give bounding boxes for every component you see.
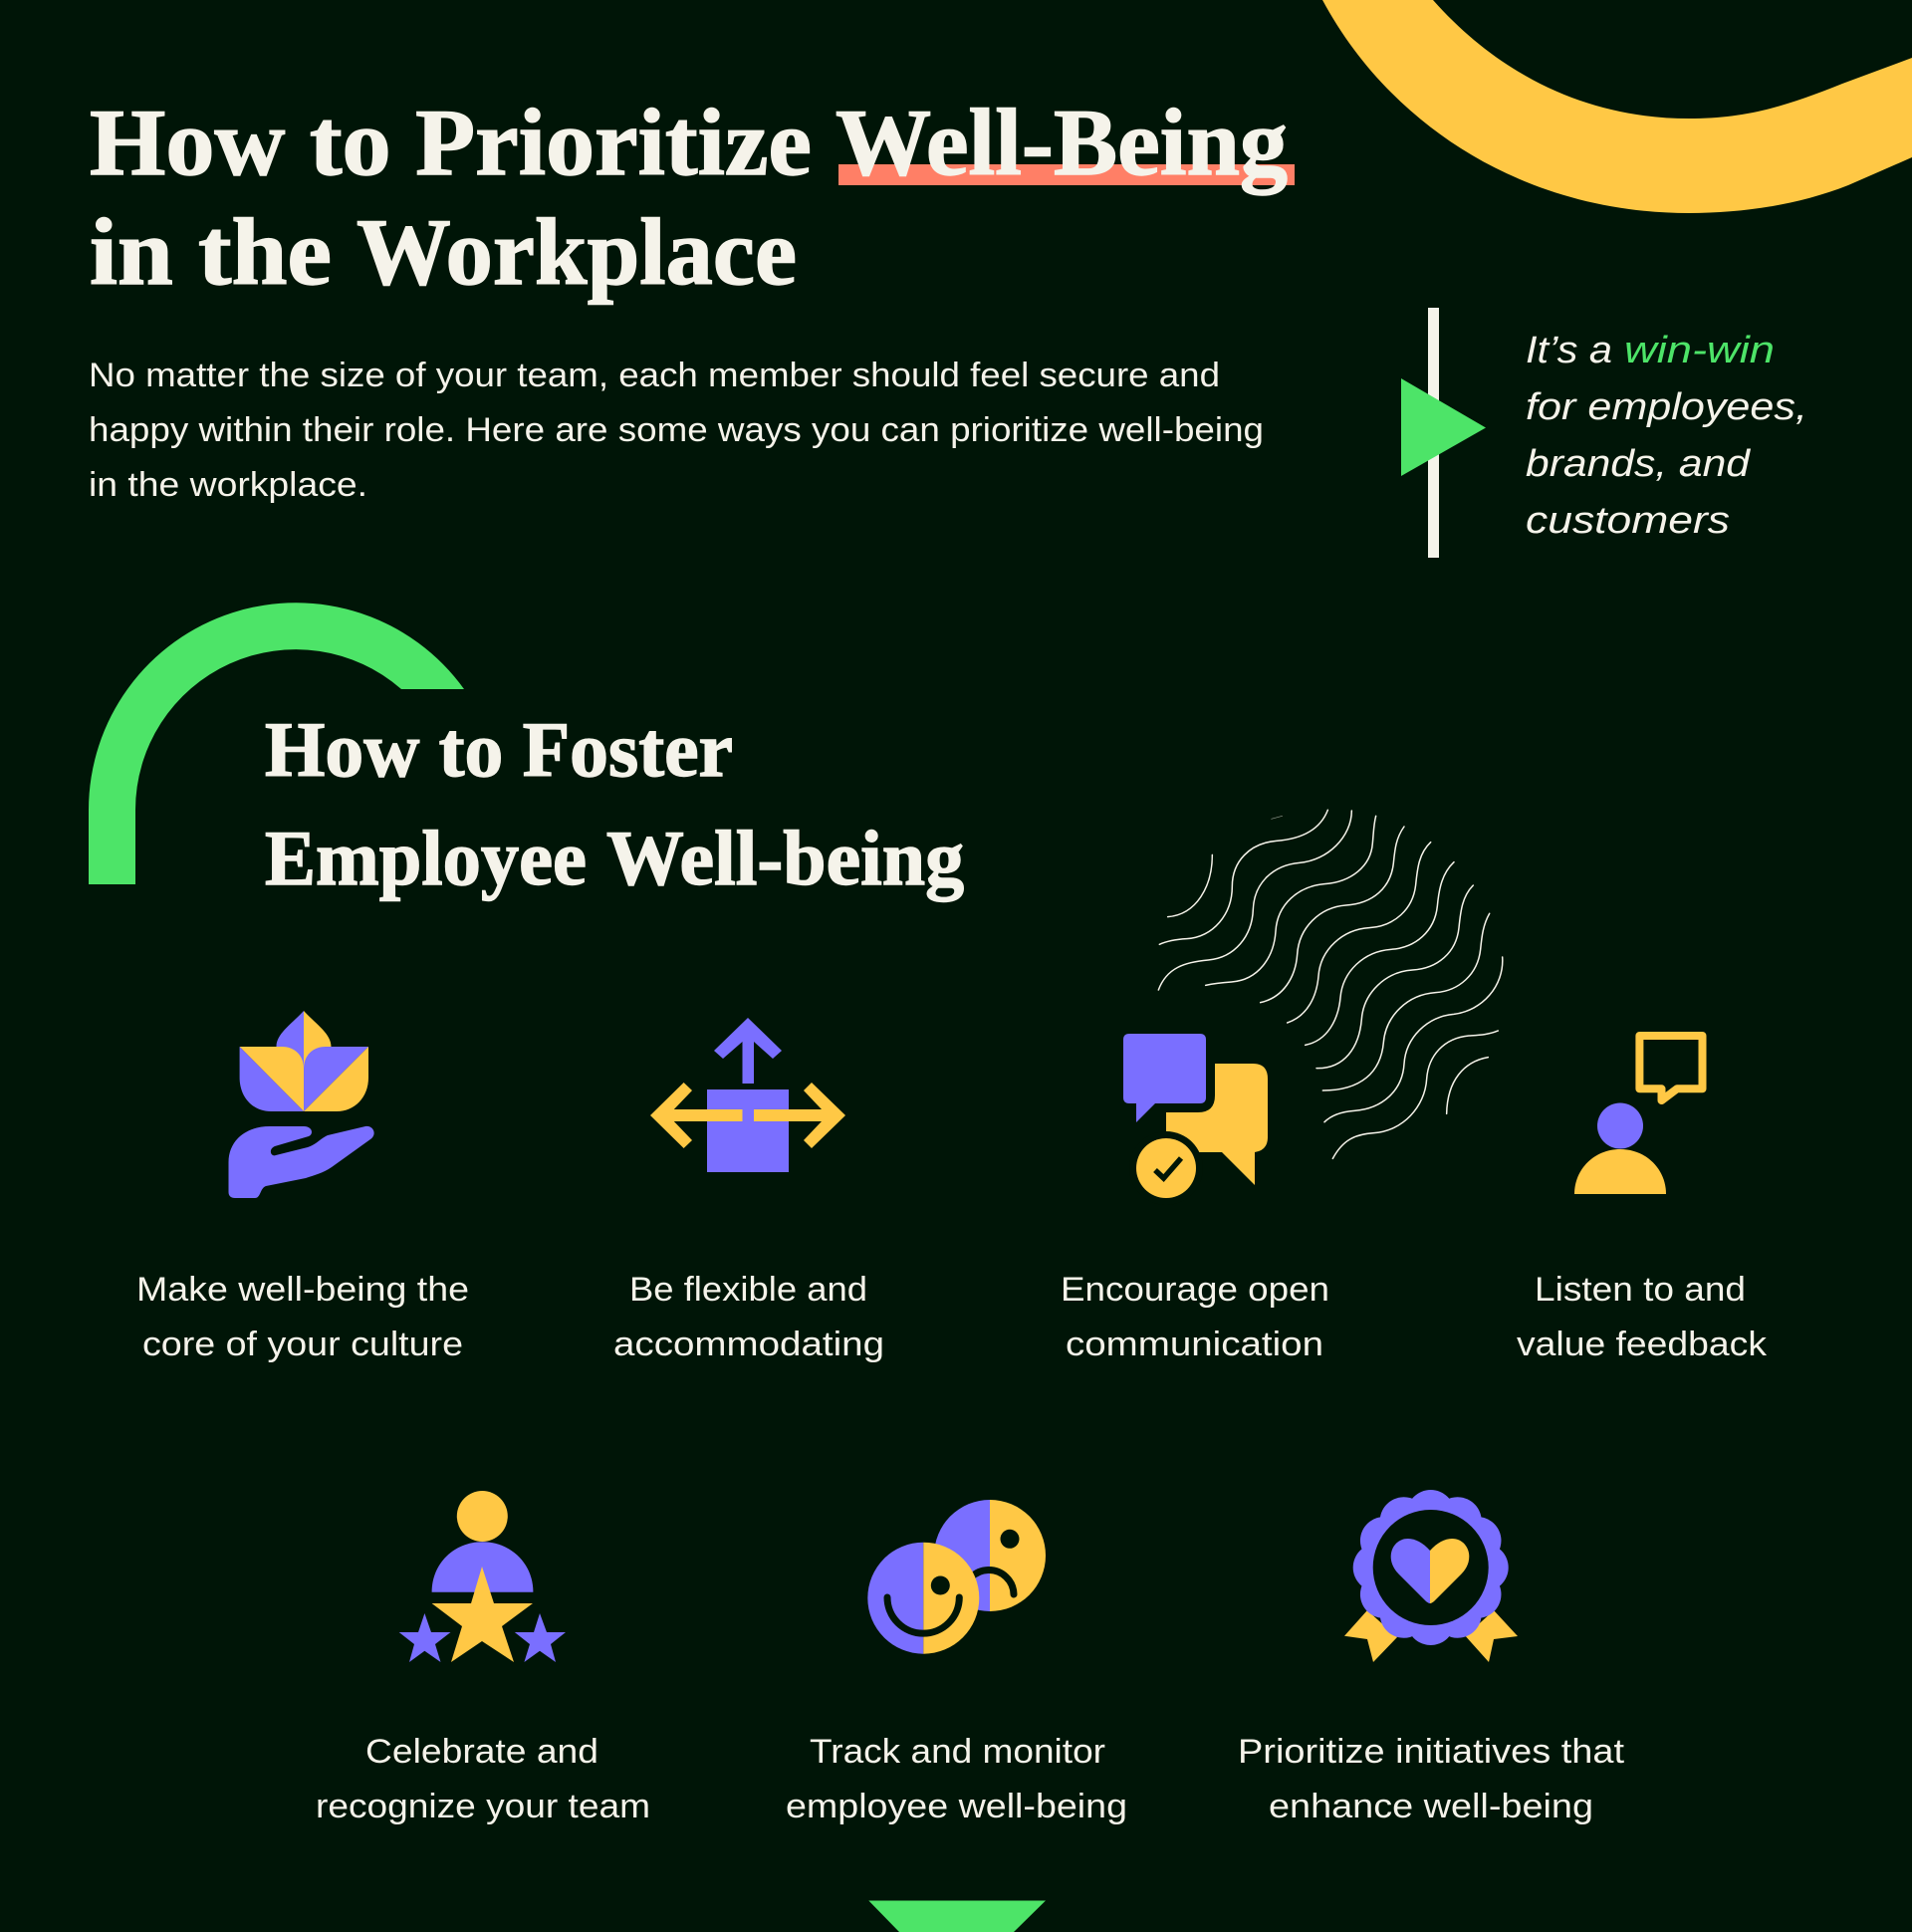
intro paragraph: [89, 357, 1264, 504]
title line 2: [90, 199, 797, 305]
title: [90, 90, 1295, 305]
title line 2: Workplace: [357, 199, 797, 305]
label: communication: Encourage open: [1061, 1271, 1329, 1309]
callout text: It’s a: [1526, 330, 1612, 371]
label: celebrate: Celebrate and: [365, 1733, 598, 1771]
label: initiatives: [1238, 1733, 1625, 1825]
callout text: [1526, 330, 1807, 542]
label: track: [786, 1733, 1127, 1825]
label: make well-being: core of your culture: [142, 1326, 463, 1363]
label: flexible: Be flexible and: [629, 1271, 867, 1309]
title line 1: [90, 90, 1288, 195]
label: communication: [1061, 1271, 1329, 1363]
icon: happy and sad faces: [867, 1500, 1046, 1654]
icon: speech bubbles with check: [1123, 1034, 1268, 1205]
intro paragraph: No matter the size of your team, each member should feel secure and: [89, 357, 1220, 394]
callout text: win-win: [1624, 330, 1775, 371]
callout green triangle: [1401, 378, 1486, 476]
label: feedback: Listen to and: [1535, 1271, 1746, 1309]
label: feedback: value feedback: [1517, 1326, 1768, 1363]
label: initiatives: enhance well-being: [1269, 1788, 1593, 1825]
section heading: How to Foster: [265, 706, 733, 793]
section heading: Well-being: [606, 815, 964, 901]
label: make well-being: [136, 1271, 469, 1363]
label: track: employee well-being: [786, 1788, 1127, 1825]
callout text: brands, and: [1526, 443, 1752, 485]
title line 1: Well-Being: [836, 90, 1288, 195]
decorative yellow swoosh: [1322, 0, 1912, 213]
label: communication: communication: [1066, 1326, 1323, 1363]
callout divider bar: [1428, 308, 1439, 558]
icon: box with arrows: [650, 1018, 845, 1172]
wavy line pattern: [1158, 810, 1503, 1158]
title highlight underline: [838, 164, 1295, 185]
label: initiatives: Prioritize initiatives that: [1238, 1733, 1625, 1771]
label: celebrate: [316, 1733, 650, 1825]
callout text: for employees,: [1526, 386, 1807, 428]
label: make well-being: Make well-being the: [136, 1271, 469, 1309]
green arc behind section heading: [89, 603, 464, 884]
label: track: Track and monitor: [810, 1733, 1105, 1771]
icon: award badge with heart: [1344, 1488, 1518, 1662]
icon: person with stars: [399, 1491, 566, 1662]
intro paragraph: in the workplace.: [89, 466, 367, 504]
bottom green triangle: [868, 1900, 1046, 1932]
label: celebrate: recognize your team: [316, 1788, 650, 1825]
title line 1: How to Prioritize: [90, 90, 812, 195]
icon: flower in hand: [229, 1011, 374, 1198]
section heading: [265, 706, 964, 901]
callout: win-win: [1401, 308, 1807, 558]
section heading: Employee: [265, 815, 587, 901]
callout text: customers: [1526, 500, 1730, 542]
label: feedback: [1517, 1271, 1768, 1363]
label: flexible: [613, 1271, 884, 1363]
intro paragraph: happy within their role. Here are some ways you can prioritize well-being: [89, 411, 1264, 449]
title line 2: in the: [90, 199, 332, 305]
label: flexible: accommodating: [613, 1326, 884, 1363]
icon: person with feedback bubble: [1574, 1036, 1703, 1194]
